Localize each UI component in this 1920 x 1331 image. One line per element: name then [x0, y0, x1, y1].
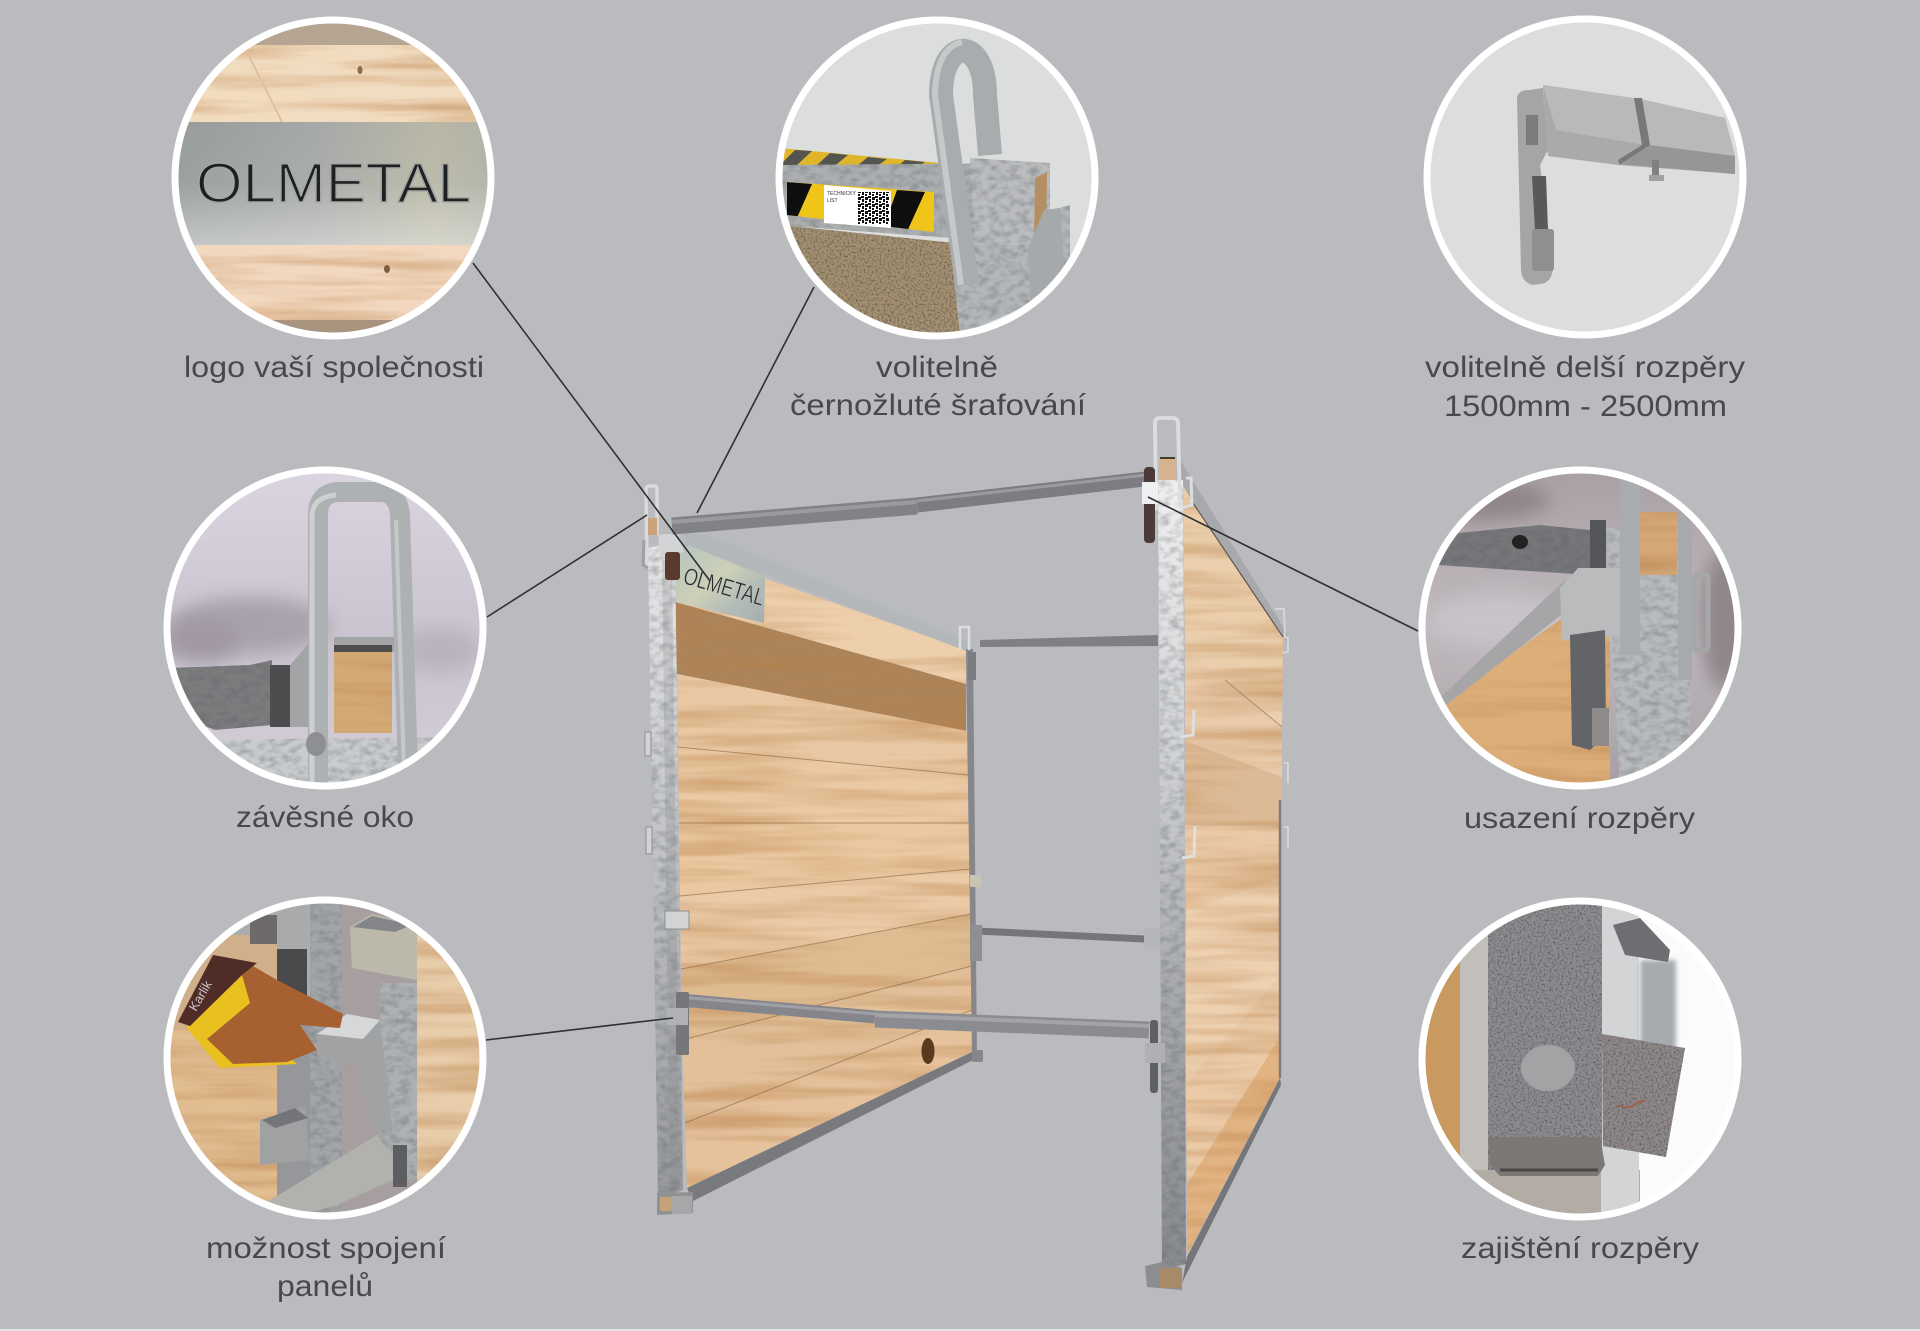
label: možnost spojení panelů: možnost spojení [206, 1232, 447, 1265]
weld blob [1521, 1045, 1575, 1091]
side clip [1694, 575, 1708, 650]
pipe [170, 660, 272, 730]
glove brown [207, 966, 343, 1064]
eye loop left [646, 486, 657, 566]
lifting loop [318, 492, 408, 790]
wood stub right [1160, 458, 1175, 480]
pipe [1438, 525, 1590, 575]
foot right [1145, 1262, 1182, 1290]
center steel [277, 1025, 310, 1196]
hook [1517, 88, 1553, 285]
wood left [170, 1030, 277, 1202]
circle: logo vaší společnosti [170, 14, 500, 344]
loop legs [1620, 470, 1640, 655]
side clips [645, 732, 689, 929]
upper square tube [350, 914, 417, 980]
label: volitelně černožluté šrafování [790, 351, 1087, 422]
wood block [1636, 512, 1677, 575]
lower pipe [262, 1135, 393, 1225]
logo plate: OLMETAL [680, 563, 768, 612]
brown catch [665, 552, 680, 580]
circle: usazení rozpěry [1410, 465, 1750, 795]
back tubes [968, 635, 1164, 1062]
logo text: OLMETAL [196, 151, 471, 214]
side hooks [1180, 710, 1195, 858]
QR sticker [824, 185, 891, 228]
clamp [1613, 918, 1670, 962]
diagonal arm [317, 1020, 393, 1135]
label: zajištění rozpěry: zajištění rozpěry [1461, 1232, 1699, 1265]
dark clip [1570, 630, 1606, 750]
steel plate [170, 122, 500, 245]
wood upper plank [189, 45, 477, 122]
label: volitelně černožluté šrafování: černožluté šrafování [790, 389, 1087, 422]
lower square tube [260, 1106, 310, 1165]
label: volitelně delší rozpěry: volitelně delší rozpěry [1425, 351, 1745, 384]
light steel strip [1460, 935, 1490, 1225]
circle: černožluté šrafování [775, 14, 1100, 344]
small loop mid [960, 627, 969, 650]
grey tube [1488, 900, 1602, 1170]
wood stub [648, 518, 657, 535]
left panel bottom rail [687, 1052, 973, 1201]
tube lip [1488, 1137, 1605, 1176]
left panel planks [675, 546, 972, 1188]
side hook top [643, 540, 648, 568]
bracket [1560, 568, 1625, 640]
left panel top rail [683, 533, 968, 651]
circle: zajištění rozpěry [1415, 895, 1745, 1230]
post [1606, 528, 1690, 790]
wood strip [1420, 960, 1464, 1170]
sleeve joint [1618, 98, 1650, 165]
lower right bracket [1150, 1020, 1158, 1093]
left panel [675, 533, 977, 1201]
cuff [178, 955, 257, 1026]
steel lower body [950, 205, 1070, 335]
top rail [1440, 580, 1565, 706]
circle: černožluté šrafování: LIST [827, 198, 838, 204]
side plate [1602, 1034, 1685, 1157]
eye loop right [1155, 418, 1180, 510]
blurred trees [170, 597, 330, 653]
label: volitelně delší rozpěry: 1500mm - 2500mm [1444, 390, 1727, 423]
panel edge post [966, 649, 977, 1055]
clip top [1590, 520, 1606, 580]
logo plate [675, 545, 768, 623]
frame rail [782, 164, 974, 238]
right bracket [380, 983, 417, 1180]
steel plate [220, 738, 434, 782]
knot stain [922, 1038, 934, 1064]
circle: černožluté šrafování: TECHNICKÝ [827, 190, 857, 197]
hazard label [787, 182, 934, 232]
box end [970, 158, 1050, 245]
bottom spreader tube [667, 992, 1165, 1093]
right panel planks [1183, 480, 1283, 1255]
lever plate [317, 1014, 380, 1039]
wood lower plank [194, 245, 472, 320]
circle: delší rozpěry [1420, 14, 1750, 344]
label: logo vaší společnosti: logo vaší společnosti [184, 351, 484, 384]
lower left bracket [676, 992, 689, 1055]
label: možnost spojení panelů [206, 1232, 447, 1303]
circle: možnost spojení panelů: Karlik [186, 977, 215, 1014]
bolt [1652, 160, 1659, 175]
wood top strip [254, 24, 412, 45]
top bracket [658, 533, 684, 556]
right panel [1180, 460, 1288, 1283]
side hook top right [1182, 478, 1192, 508]
label: volitelně černožluté šrafování: volitelně [876, 351, 998, 384]
product: trench shoring box [643, 418, 1288, 1290]
label: volitelně delší rozpěry [1425, 351, 1745, 423]
right post [1145, 418, 1195, 1290]
glove yellow [186, 975, 297, 1068]
label: závěsné oko: závěsné oko [236, 801, 414, 834]
right edge clips [1275, 609, 1288, 848]
square bar [1543, 85, 1735, 174]
wood right [417, 934, 480, 1182]
pipe clip [270, 665, 290, 727]
burlap panel [790, 226, 960, 340]
plank seams [678, 747, 972, 1123]
hazard top strip [783, 148, 938, 165]
pipe behind [1601, 900, 1639, 1225]
wood panel [1443, 620, 1610, 790]
wood block [334, 652, 392, 733]
right panel bottom rail [1182, 1078, 1281, 1283]
label: možnost spojení panelů: panelů [277, 1270, 373, 1303]
top right bracket [1144, 467, 1155, 543]
top spreader tube [672, 467, 1158, 543]
rust mark [1618, 1101, 1646, 1108]
foot left [657, 1192, 693, 1215]
weld [306, 732, 326, 756]
left post [643, 486, 693, 1215]
circle: závěsné oko [160, 465, 495, 800]
leader lines [473, 263, 1418, 1040]
right panel top rail [1180, 460, 1287, 642]
circle: možnost spojení panelů [160, 895, 492, 1225]
lifting eye [941, 51, 990, 285]
label: usazení rozpěry: usazení rozpěry [1464, 802, 1695, 835]
